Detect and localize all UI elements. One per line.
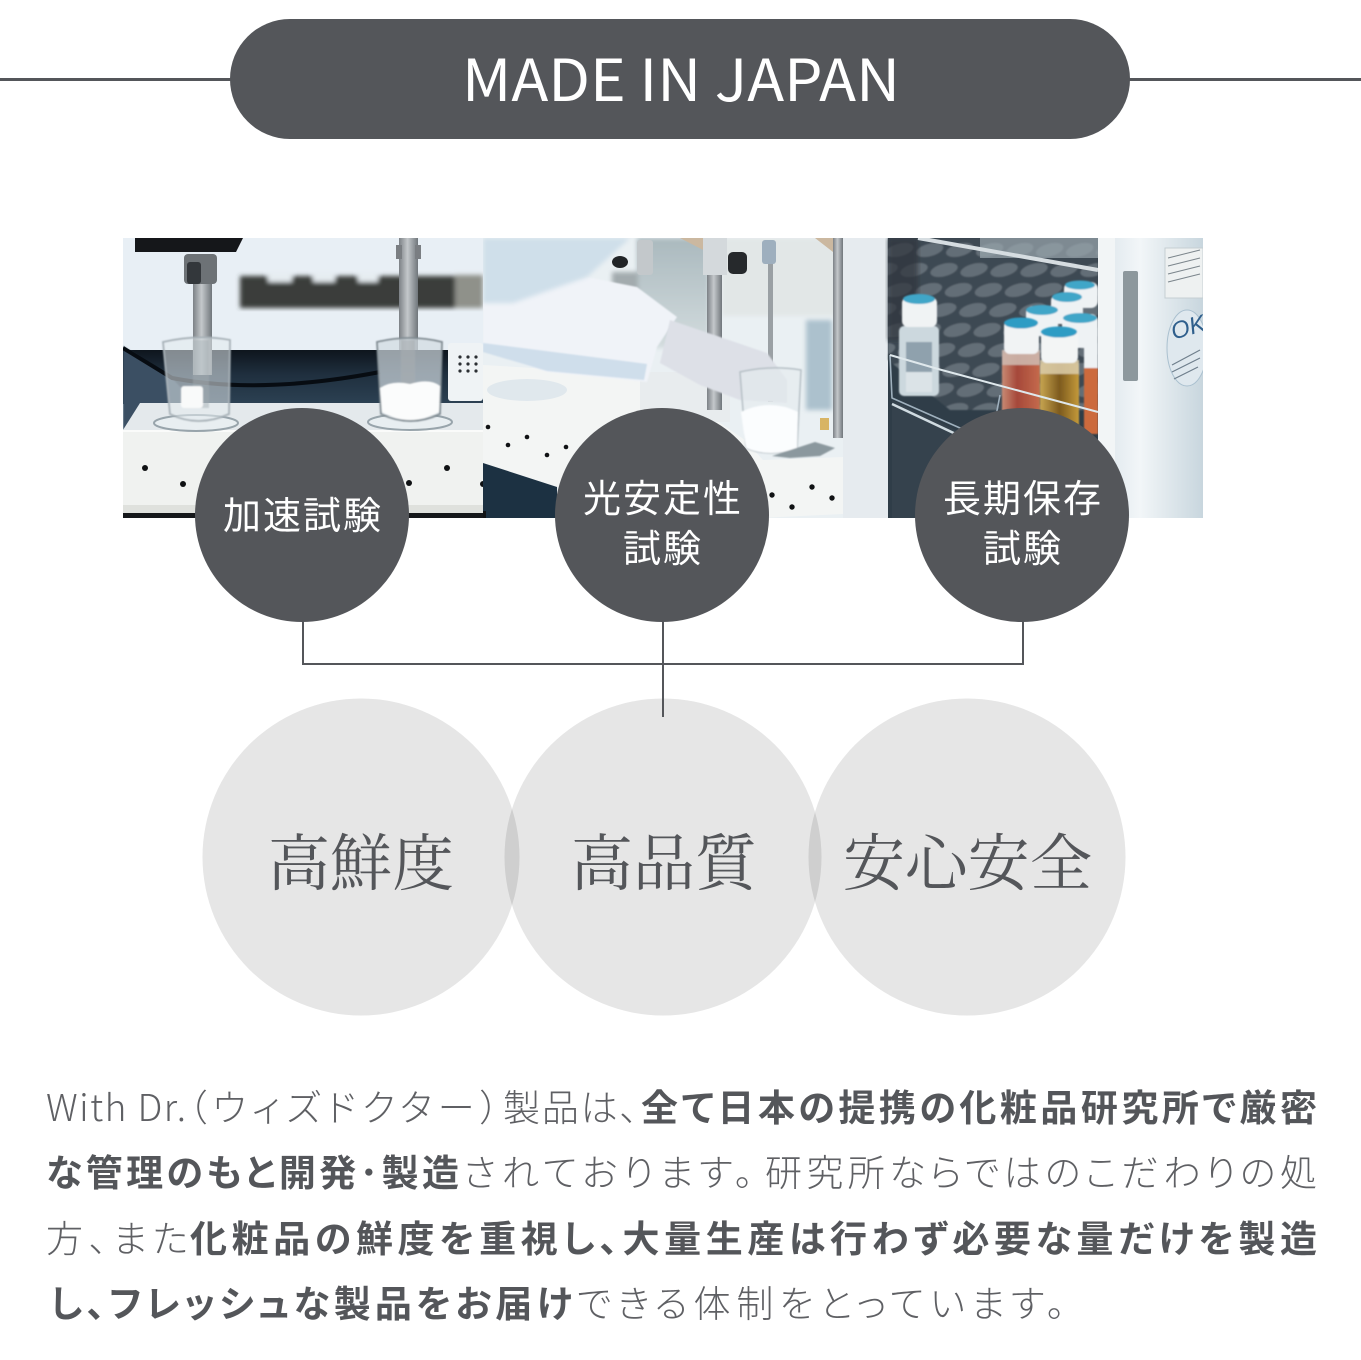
- body paragraph: （ウィズドクター）: [188, 1078, 499, 1132]
- machine base: [483, 365, 843, 518]
- beaker: [740, 368, 835, 458]
- badge: long-term storage test: 試験: [983, 518, 1061, 573]
- body paragraph: 製品は、: [503, 1078, 638, 1132]
- incubator door: [1133, 238, 1203, 518]
- photo: long-term storage test: [843, 238, 1210, 518]
- body paragraph: されております。: [463, 1143, 753, 1197]
- sleeve: [608, 282, 677, 381]
- body paragraph: な管理のもと開発･製造: [46, 1143, 459, 1197]
- body paragraph: 全て日本の提携の化粧品研究所で厳密: [641, 1078, 1317, 1132]
- body paragraph: [46, 1078, 1317, 1328]
- header banner: [0, 19, 1361, 139]
- badge: light stability test: [555, 408, 769, 622]
- photo strip: laboratory tests: [123, 238, 1203, 518]
- overlapping value circles: [202, 698, 1126, 1016]
- body paragraph: With Dr.: [46, 1078, 186, 1132]
- badge: light stability test: 試験: [623, 518, 701, 573]
- photo: accelerated test: [123, 238, 486, 518]
- body paragraph: 化粧品の鮮度を重視し、大量生産は行わず必要な量だけを製造: [190, 1209, 1317, 1263]
- badge: accelerated test: 加速試験: [223, 485, 381, 540]
- value: high freshness: 高鮮度: [268, 814, 454, 903]
- rods and clamps: [707, 270, 722, 410]
- badge: long-term storage test: [915, 408, 1129, 622]
- machine base: [123, 403, 483, 430]
- photo: light stability test: [483, 238, 843, 518]
- clear vial: [899, 294, 939, 396]
- badge: long-term storage test: 長期保存: [943, 468, 1101, 523]
- glove: [660, 320, 776, 402]
- beakers: [163, 337, 442, 421]
- orange vial: [1001, 316, 1041, 410]
- back vials: [1026, 280, 1098, 434]
- body paragraph: 研究所ならではのこだわりの処: [765, 1143, 1317, 1197]
- amber vial: [1039, 326, 1080, 425]
- value: high quality: 高品質: [571, 814, 759, 903]
- badge: light stability test: 光安定性: [583, 468, 741, 523]
- title: MADE IN JAPAN: [462, 34, 900, 118]
- value: peace of mind and safety: 安心安全: [843, 814, 1092, 903]
- badge: accelerated test: [195, 408, 409, 622]
- transparent tray: [890, 355, 1098, 436]
- shelf rail: [918, 238, 1098, 270]
- body paragraph: できる体制をとっています。: [577, 1274, 1065, 1328]
- lab wall: [612, 238, 837, 410]
- body paragraph: し、フレッシュな製品をお届け: [50, 1274, 572, 1328]
- body paragraph: 方、また: [46, 1209, 188, 1263]
